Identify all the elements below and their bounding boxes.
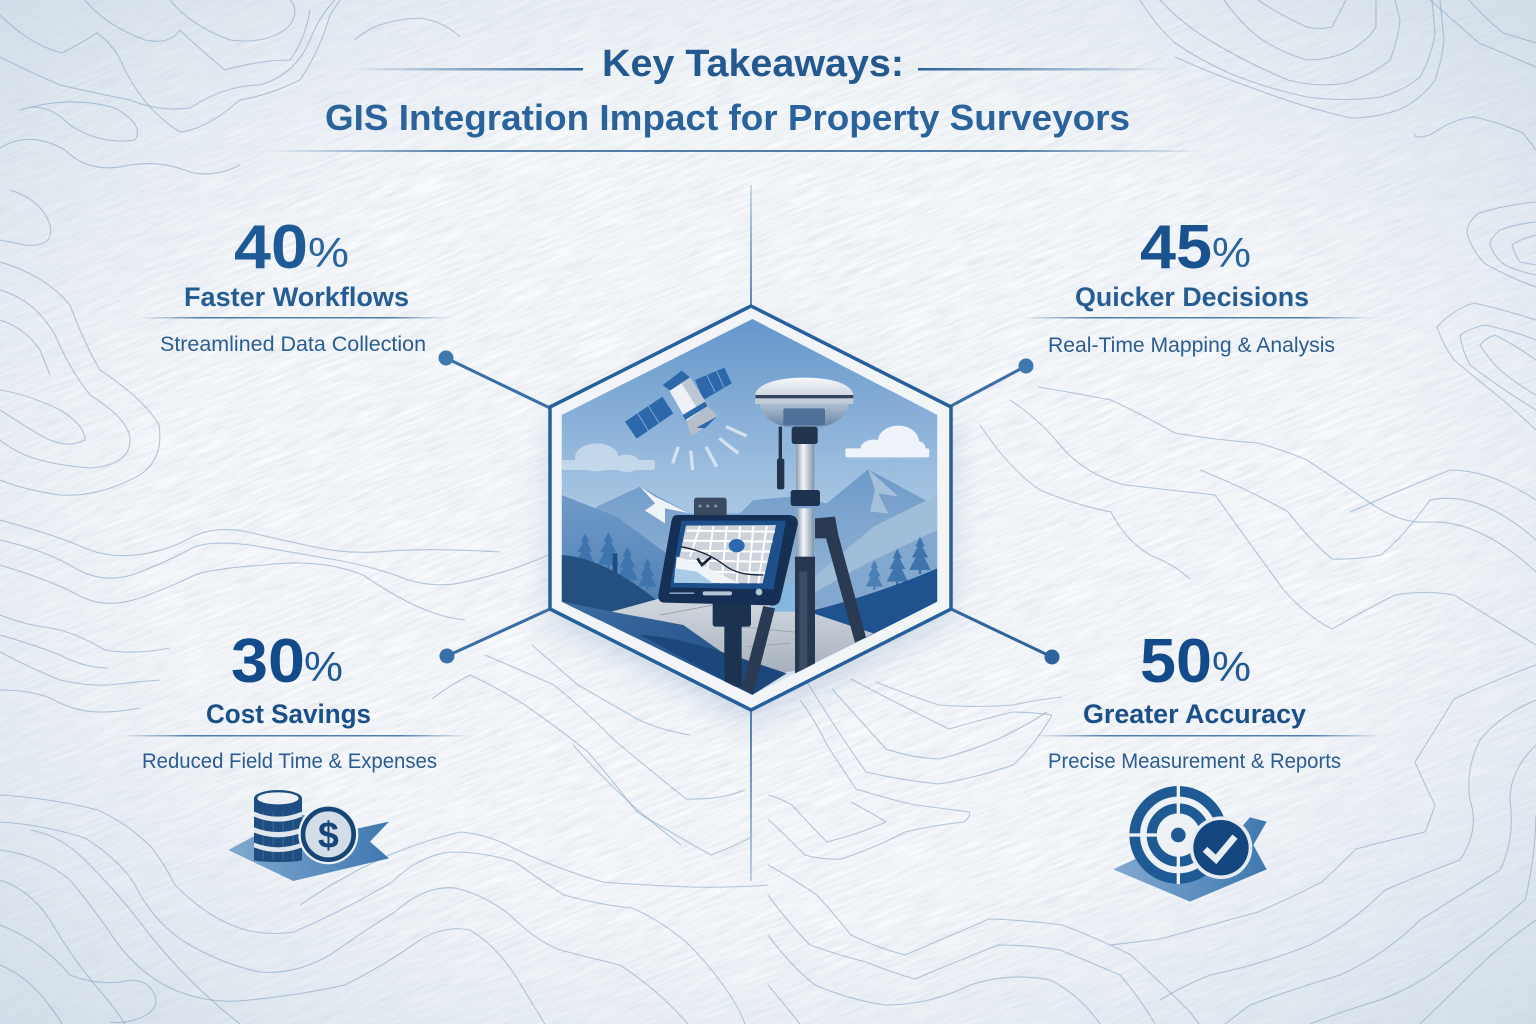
icon: coins and dollar: $ [318, 813, 339, 855]
satellite [625, 368, 732, 439]
connector: 45% [951, 358, 1034, 406]
trees [575, 532, 931, 590]
value: 45 [1140, 213, 1212, 282]
description: Streamlined Data Collection [160, 333, 426, 356]
description: Real-Time Mapping & Analysis [1048, 334, 1335, 357]
connector: 40% [438, 350, 550, 408]
title [265, 43, 1205, 152]
title line 2: GIS Integration Impact for Property Surveyors [325, 97, 1130, 138]
percent sign: % [1212, 643, 1251, 690]
vertical connector top [750, 185, 752, 306]
central hexagon illustration [550, 306, 951, 722]
description: Precise Measurement & Reports [1048, 750, 1341, 773]
stat: 50% greater accuracy [1035, 627, 1380, 773]
icon: coins and dollar [228, 790, 389, 881]
icon: target and check [1113, 786, 1267, 902]
title line 1: Key Takeaways: [602, 43, 904, 85]
percent sign: % [1212, 229, 1251, 276]
percent sign: % [304, 643, 343, 690]
clouds [562, 443, 655, 472]
vertical connector bottom [750, 711, 752, 881]
stat: 45% quicker decisions [1020, 213, 1375, 357]
far mountains [562, 469, 937, 620]
tripod legs [742, 517, 866, 693]
heading: Faster Workflows [184, 282, 409, 312]
heading: Quicker Decisions [1075, 282, 1309, 312]
field tablet [658, 498, 798, 605]
value: 50 [1140, 627, 1212, 696]
connector: 30% [440, 609, 550, 664]
stat: 40% faster workflows [138, 213, 452, 356]
value: 30 [231, 627, 305, 696]
stat: 30% cost savings [120, 627, 470, 773]
connector: 50% [951, 609, 1060, 664]
GNSS receiver on pole [755, 378, 853, 673]
value: 40 [234, 213, 308, 282]
description: Reduced Field Time & Expenses [142, 750, 437, 773]
percent sign: % [308, 229, 349, 276]
heading: Cost Savings [206, 699, 371, 729]
heading: Greater Accuracy [1083, 699, 1306, 729]
signal rays [673, 427, 747, 470]
ground path [562, 602, 757, 695]
sky [560, 317, 940, 697]
dark hills [562, 555, 656, 620]
tablet mount [713, 600, 751, 687]
